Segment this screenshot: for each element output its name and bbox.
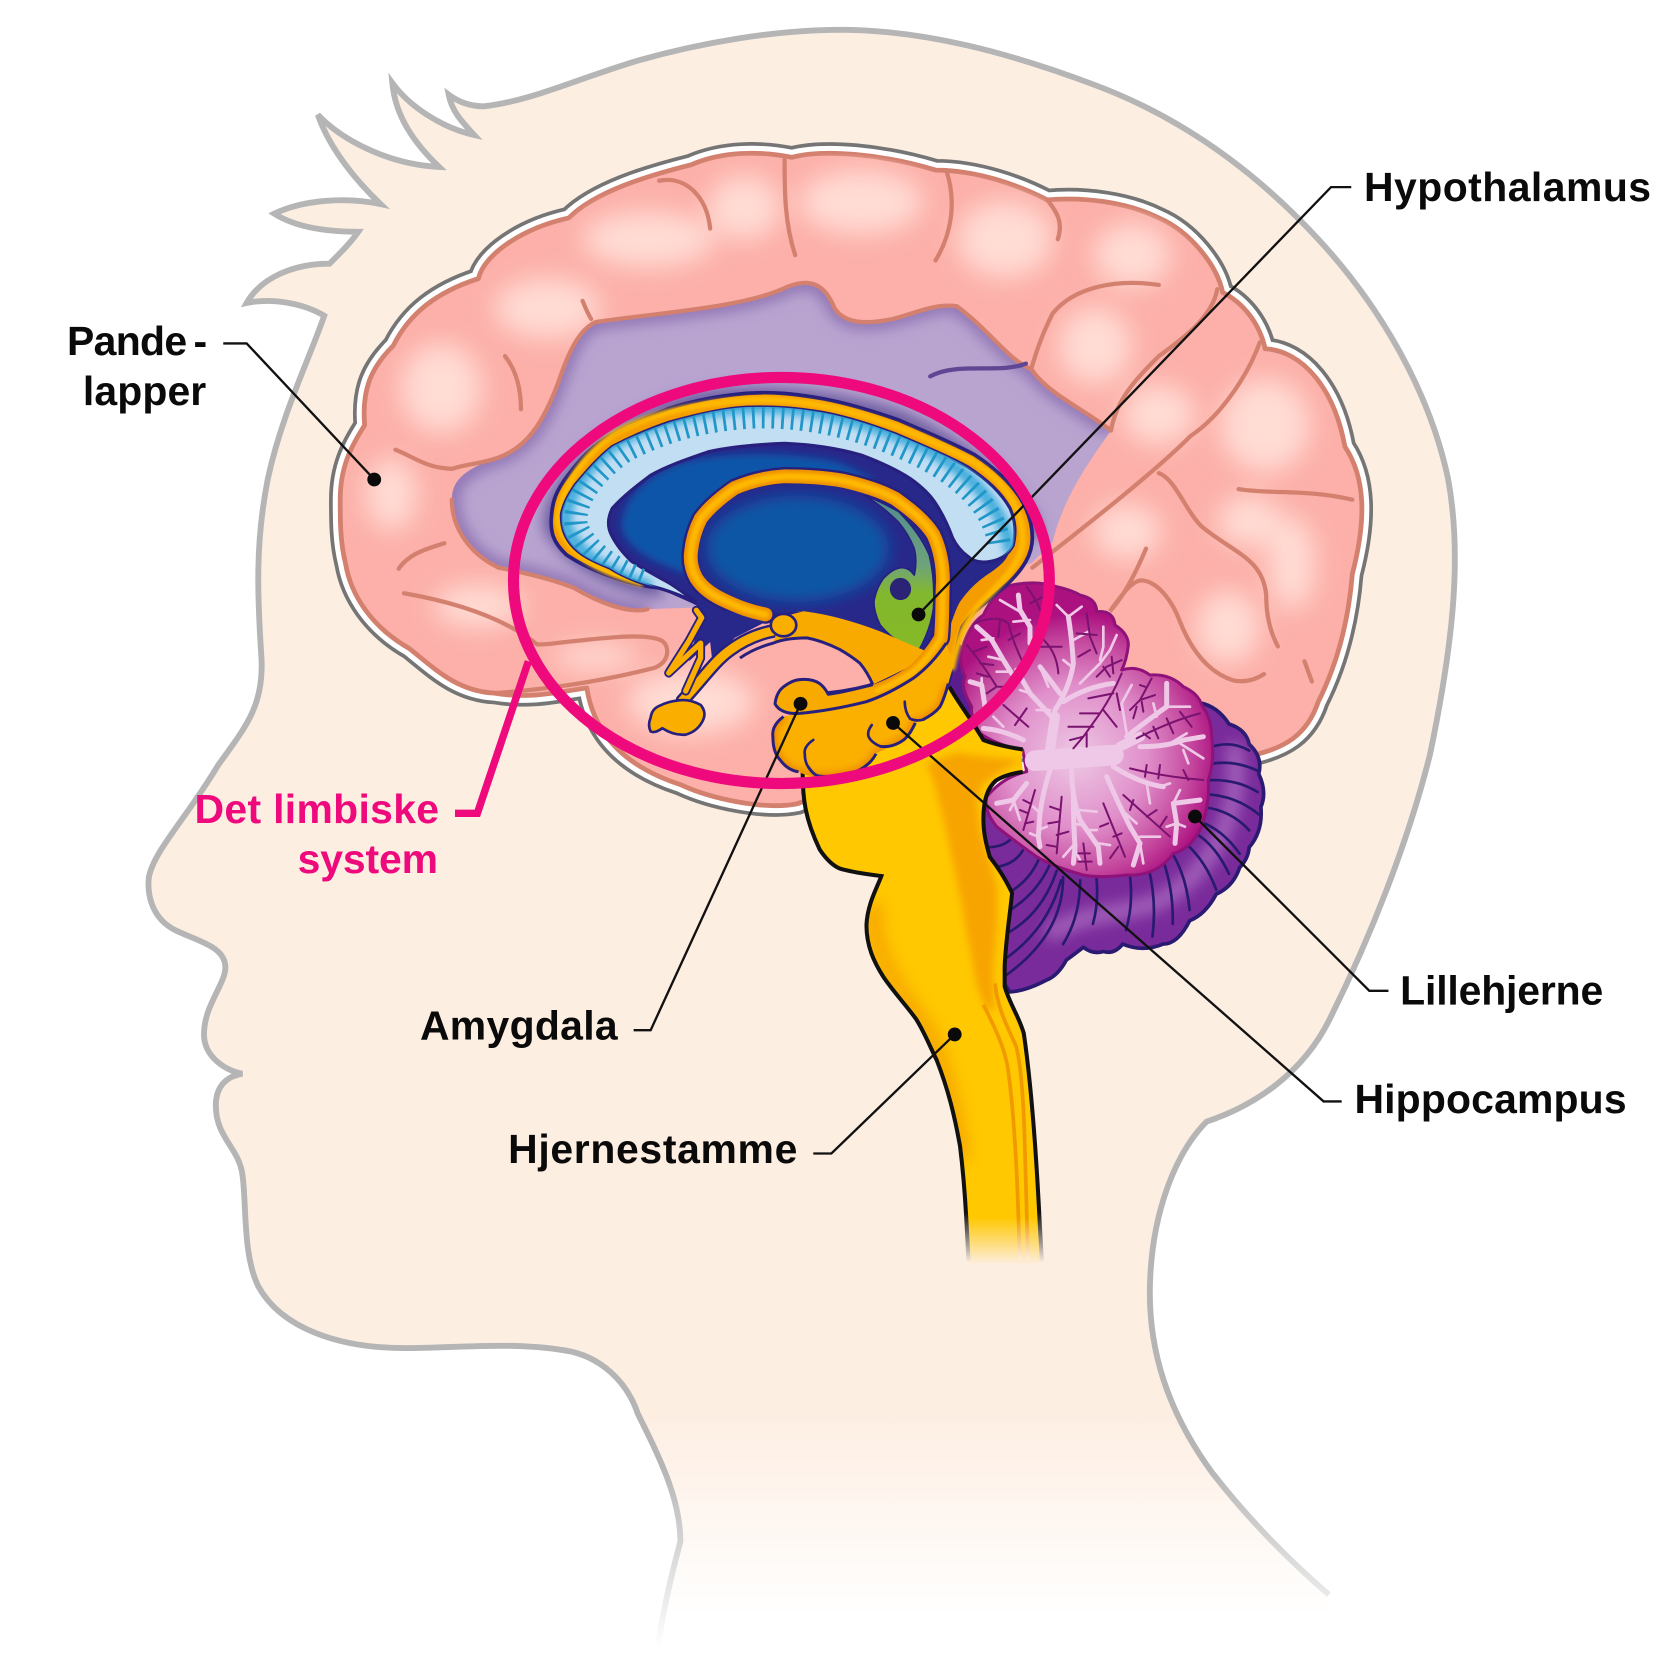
leader <box>893 723 1342 1101</box>
olfactory limb <box>683 630 776 701</box>
dark purple rear piece <box>940 643 994 744</box>
anchor dot <box>948 1028 962 1041</box>
stem thin line right <box>995 983 1028 1260</box>
light blue band <box>561 407 1015 602</box>
mammillary small body <box>771 614 796 636</box>
lump outline <box>773 684 948 776</box>
leader <box>223 343 374 479</box>
leader <box>1195 816 1388 991</box>
cortex white gap <box>340 153 1362 806</box>
hypothalamus teal and green <box>864 495 934 653</box>
label: Hypothalamus <box>912 164 1651 621</box>
arbor vitae lobes and branches <box>961 583 1213 877</box>
text: Lillehjerne <box>1400 968 1603 1014</box>
head outline <box>148 30 1455 1662</box>
hyphen: - <box>193 318 207 364</box>
leader <box>919 187 1351 614</box>
blue blob centre <box>706 495 889 602</box>
purple fill <box>452 283 1111 610</box>
navy interior <box>601 434 1010 651</box>
stem right edge <box>983 772 1042 1261</box>
anchor dot <box>794 697 807 711</box>
cerebrum cortex <box>340 153 1362 806</box>
purple inner brain region <box>452 283 1111 610</box>
limbic system ring and callout <box>195 377 1049 882</box>
label: Amygdala <box>420 697 807 1049</box>
cingulate band golden core <box>558 400 1023 670</box>
text line two: lapper <box>83 368 206 414</box>
lump crease lines <box>805 702 923 767</box>
leader <box>634 704 801 1030</box>
anchor dot <box>1188 810 1202 823</box>
cingulate blue glow <box>621 454 877 574</box>
olfactory bulb <box>649 700 704 735</box>
arch edge <box>740 638 873 685</box>
cortex fold lines <box>395 159 1352 693</box>
fornix ring golden centre <box>691 476 943 702</box>
stem left edge <box>803 773 969 1261</box>
band outer blue shading <box>565 407 1010 587</box>
text: Amygdala <box>420 1003 619 1049</box>
purple region salmon edge <box>452 283 1111 469</box>
fornix ring outline <box>691 476 943 702</box>
light branches <box>970 595 1203 865</box>
text: Hjernestamme <box>508 1126 797 1172</box>
label: Hjernestamme <box>508 1028 962 1172</box>
hippocampal lumps <box>773 643 954 776</box>
lump shading <box>773 684 948 776</box>
dark fold <box>930 364 1026 376</box>
purple lower salmon edge <box>452 500 647 610</box>
label: Lillehjerne <box>1188 810 1603 1014</box>
text: Hippocampus <box>1354 1076 1627 1122</box>
cerebellum sheen <box>1047 744 1236 936</box>
cortex highlights <box>366 170 1315 734</box>
amygdala and ring edge lines <box>775 643 946 714</box>
pink ellipse <box>513 377 1049 784</box>
zigzag core <box>669 610 702 691</box>
label: Pandelapper <box>67 318 381 486</box>
fat arch <box>773 611 925 685</box>
head silhouette <box>148 30 1455 1662</box>
outer ridged cerebellum <box>978 703 1264 992</box>
purple inner shadow <box>452 283 1111 610</box>
brain stem <box>803 687 1042 1265</box>
leader <box>813 1034 955 1154</box>
zigzag tract <box>669 610 702 691</box>
limbic structures <box>551 393 1032 776</box>
stem soft shading <box>874 904 962 1159</box>
stem orange band <box>926 753 1022 1010</box>
stem thin line left <box>983 1005 1020 1260</box>
pink text line two: system <box>298 836 438 882</box>
cortex outer grey outline <box>340 153 1362 806</box>
label: Hippocampus <box>886 716 1627 1122</box>
fornix ring core <box>691 476 943 702</box>
pink text line one: Det limbiske <box>195 786 439 832</box>
text: Pande <box>67 318 187 364</box>
pink leader <box>455 661 528 813</box>
lobe shape <box>961 583 1213 877</box>
blue tick marks <box>576 417 999 579</box>
anchor dot <box>886 716 900 730</box>
inner blue blob <box>698 484 934 652</box>
stem yellow body <box>803 687 1042 1265</box>
halo around limbic structure <box>553 397 1033 588</box>
cortex pink surface <box>340 153 1362 806</box>
cingulate outer orange band <box>551 393 1032 684</box>
cerebellum <box>940 583 1264 992</box>
navy triangle <box>689 605 770 661</box>
dark branches <box>967 587 1203 870</box>
hypothalamus nucleus <box>890 578 911 600</box>
text: Hypothalamus <box>1364 164 1651 210</box>
olfactory limb core <box>683 630 776 701</box>
anchor dot <box>367 473 381 486</box>
amygdala bulb <box>775 679 877 714</box>
cerebellum ridges <box>987 744 1259 977</box>
head fill <box>148 30 1455 1662</box>
anchor dot <box>912 608 925 621</box>
stem upper right edge <box>949 687 1023 750</box>
